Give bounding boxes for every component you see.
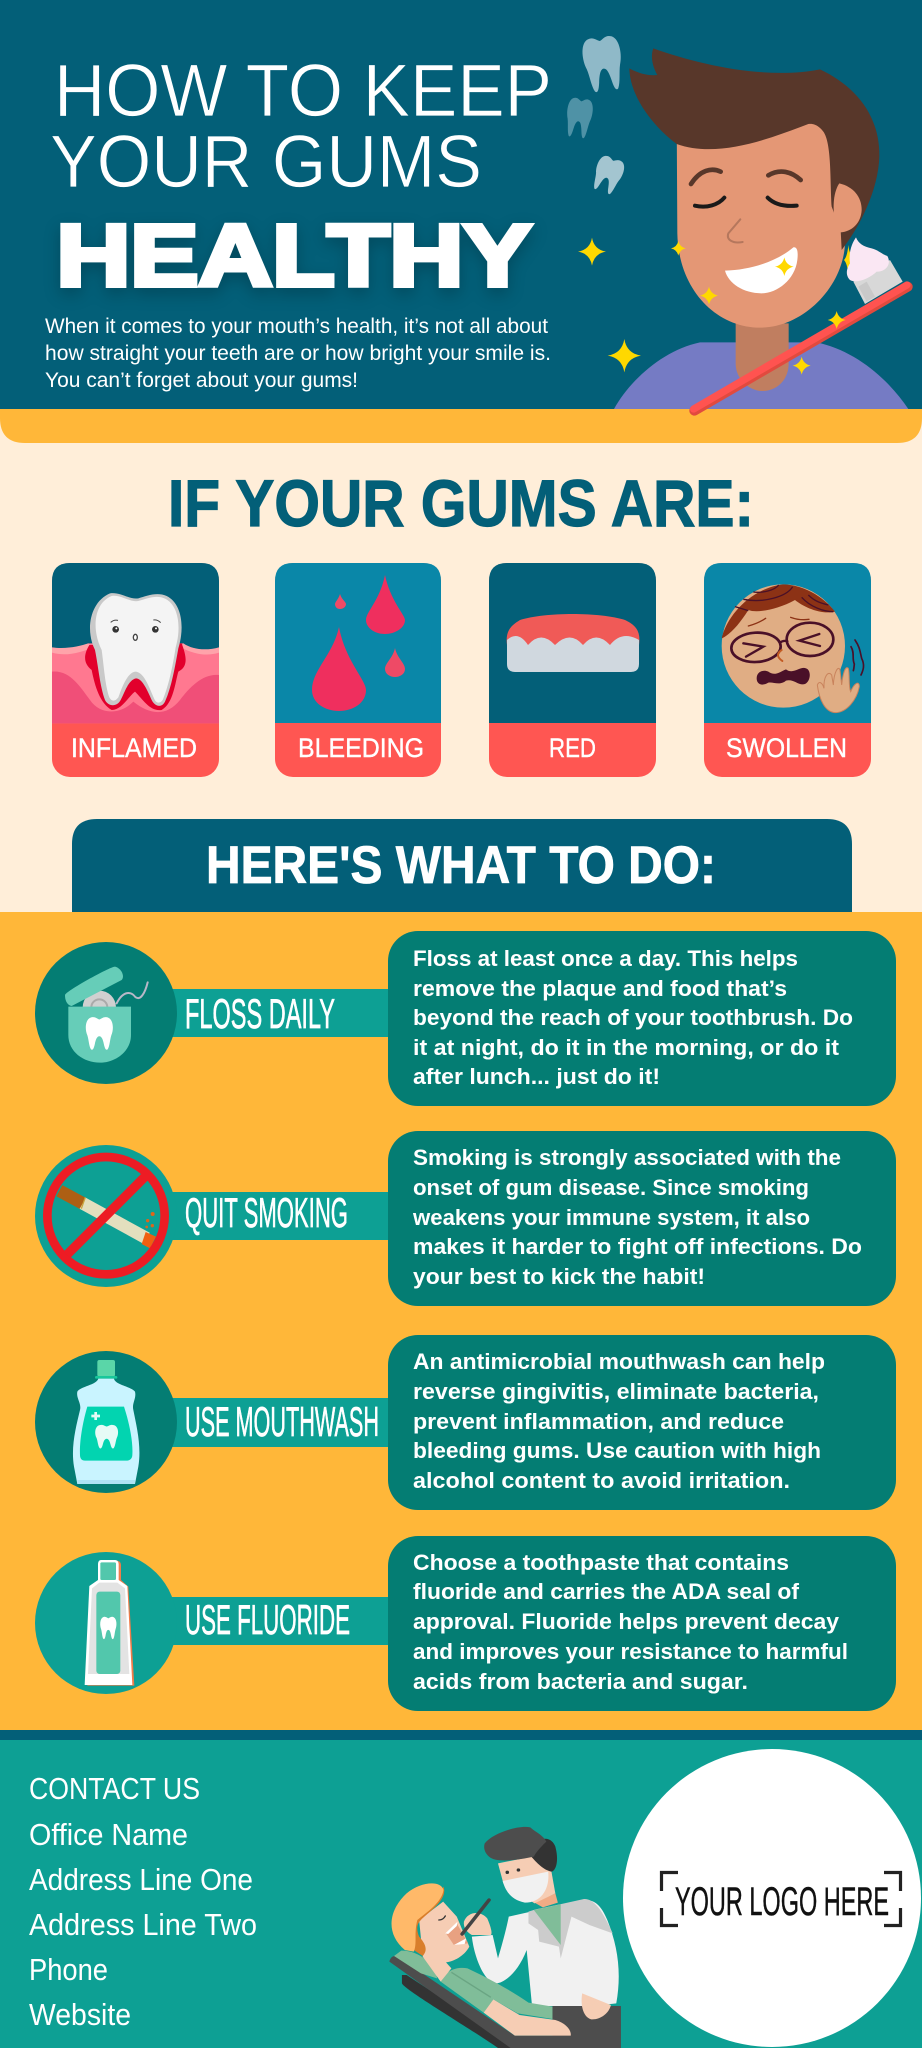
yellow band under header xyxy=(0,409,922,443)
step label: USE FLUORIDE xyxy=(185,1596,350,1643)
step: floss daily xyxy=(35,931,896,1106)
intro paragraph: When it comes to your mouth’s health, it’s not all about xyxy=(45,315,548,338)
text box: beyond the reach of your toothbrush. Do xyxy=(413,1005,853,1030)
intro paragraph: You can’t forget about your gums! xyxy=(45,369,358,392)
panel: here's what to do section xyxy=(0,819,922,1730)
label: BLEEDING xyxy=(298,733,424,763)
title: HEALTHY xyxy=(56,208,532,304)
label: SWOLLEN xyxy=(726,733,847,763)
contact details: Website xyxy=(29,1997,131,2032)
step: use fluoride xyxy=(35,1536,896,1711)
text box: and improves your resistance to harmful xyxy=(413,1639,848,1664)
panel: footer xyxy=(0,1730,922,2048)
contact details: CONTACT US xyxy=(29,1771,200,1806)
text box: An antimicrobial mouthwash can help xyxy=(413,1349,825,1374)
text box xyxy=(388,1536,896,1711)
text box: onset of gum disease. Since smoking xyxy=(413,1175,809,1200)
title: HOW TO KEEP xyxy=(54,49,552,132)
text box: remove the plaque and food that’s xyxy=(413,976,787,1001)
text box: Choose a toothpaste that contains xyxy=(413,1550,789,1575)
step label: USE MOUTHWASH xyxy=(185,1398,379,1445)
text box: alcohol content to avoid irritation. xyxy=(413,1468,790,1493)
card: inflamed xyxy=(52,563,219,777)
contact details: Address Line Two xyxy=(29,1907,257,1942)
icon: red gums and teeth xyxy=(507,614,639,672)
label: RED xyxy=(549,733,596,763)
contact details: Address Line One xyxy=(29,1862,253,1897)
card: bleeding xyxy=(275,563,441,777)
banner xyxy=(72,819,852,912)
icon: floating teeth xyxy=(564,35,627,196)
text box: reverse gingivitis, eliminate bacteria, xyxy=(413,1379,819,1404)
intro paragraph xyxy=(45,315,551,392)
step label: QUIT SMOKING xyxy=(185,1189,348,1236)
icon: dental floss xyxy=(65,967,148,1063)
text box: weakens your immune system, it also xyxy=(412,1205,810,1230)
text box: bleeding gums. Use caution with high xyxy=(413,1438,821,1463)
step: quit smoking xyxy=(35,1131,896,1306)
icon: mouthwash bottle xyxy=(73,1360,139,1484)
text box: after lunch... just do it! xyxy=(413,1064,660,1089)
text box: Floss at least once a day. This helps xyxy=(413,946,798,971)
icon: blood drops xyxy=(312,575,405,711)
step label: FLOSS DAILY xyxy=(185,990,335,1037)
intro paragraph: how straight your teeth are or how bright your smile is. xyxy=(45,342,551,365)
text box xyxy=(388,931,896,1106)
card: swollen xyxy=(704,563,871,777)
icon: tooth with inflamed gum xyxy=(52,593,219,723)
illustration: dentist and patient xyxy=(389,1827,621,2048)
logo placeholder xyxy=(623,1749,921,2047)
step: use mouthwash xyxy=(35,1335,896,1510)
panel: header xyxy=(0,0,922,443)
heading: if your gums are: IF YOUR GUMS ARE: xyxy=(168,466,754,540)
illustration: smiling man brushing teeth xyxy=(578,48,908,411)
title xyxy=(50,49,552,304)
title: YOUR GUMS xyxy=(50,120,482,203)
contact details: Office Name xyxy=(29,1817,188,1852)
contact details xyxy=(29,1771,257,2032)
text box: it at night, do it in the morning, or do it xyxy=(413,1035,840,1060)
text box xyxy=(388,1131,896,1306)
icon: no smoking xyxy=(47,1157,165,1274)
text box: acids from bacteria and sugar. xyxy=(413,1669,748,1694)
banner: HERE'S WHAT TO DO: xyxy=(206,836,716,895)
text box: approval. Fluoride helps prevent decay xyxy=(413,1609,840,1634)
label: INFLAMED xyxy=(71,733,197,763)
card: red xyxy=(489,563,656,777)
contact details: Phone xyxy=(29,1952,108,1987)
icon: sparkles xyxy=(578,238,846,375)
text box: Smoking is strongly associated with the xyxy=(413,1145,841,1170)
text box: makes it harder to fight off infections. Do xyxy=(413,1234,862,1259)
text box: your best to kick the habit! xyxy=(413,1264,705,1289)
icon: toothpaste tube xyxy=(85,1560,134,1686)
text box xyxy=(388,1335,896,1510)
icon: face in pain xyxy=(722,584,864,713)
text box: fluoride and carries the ADA seal of xyxy=(413,1579,800,1604)
text box: prevent inflammation, and reduce xyxy=(413,1409,784,1434)
